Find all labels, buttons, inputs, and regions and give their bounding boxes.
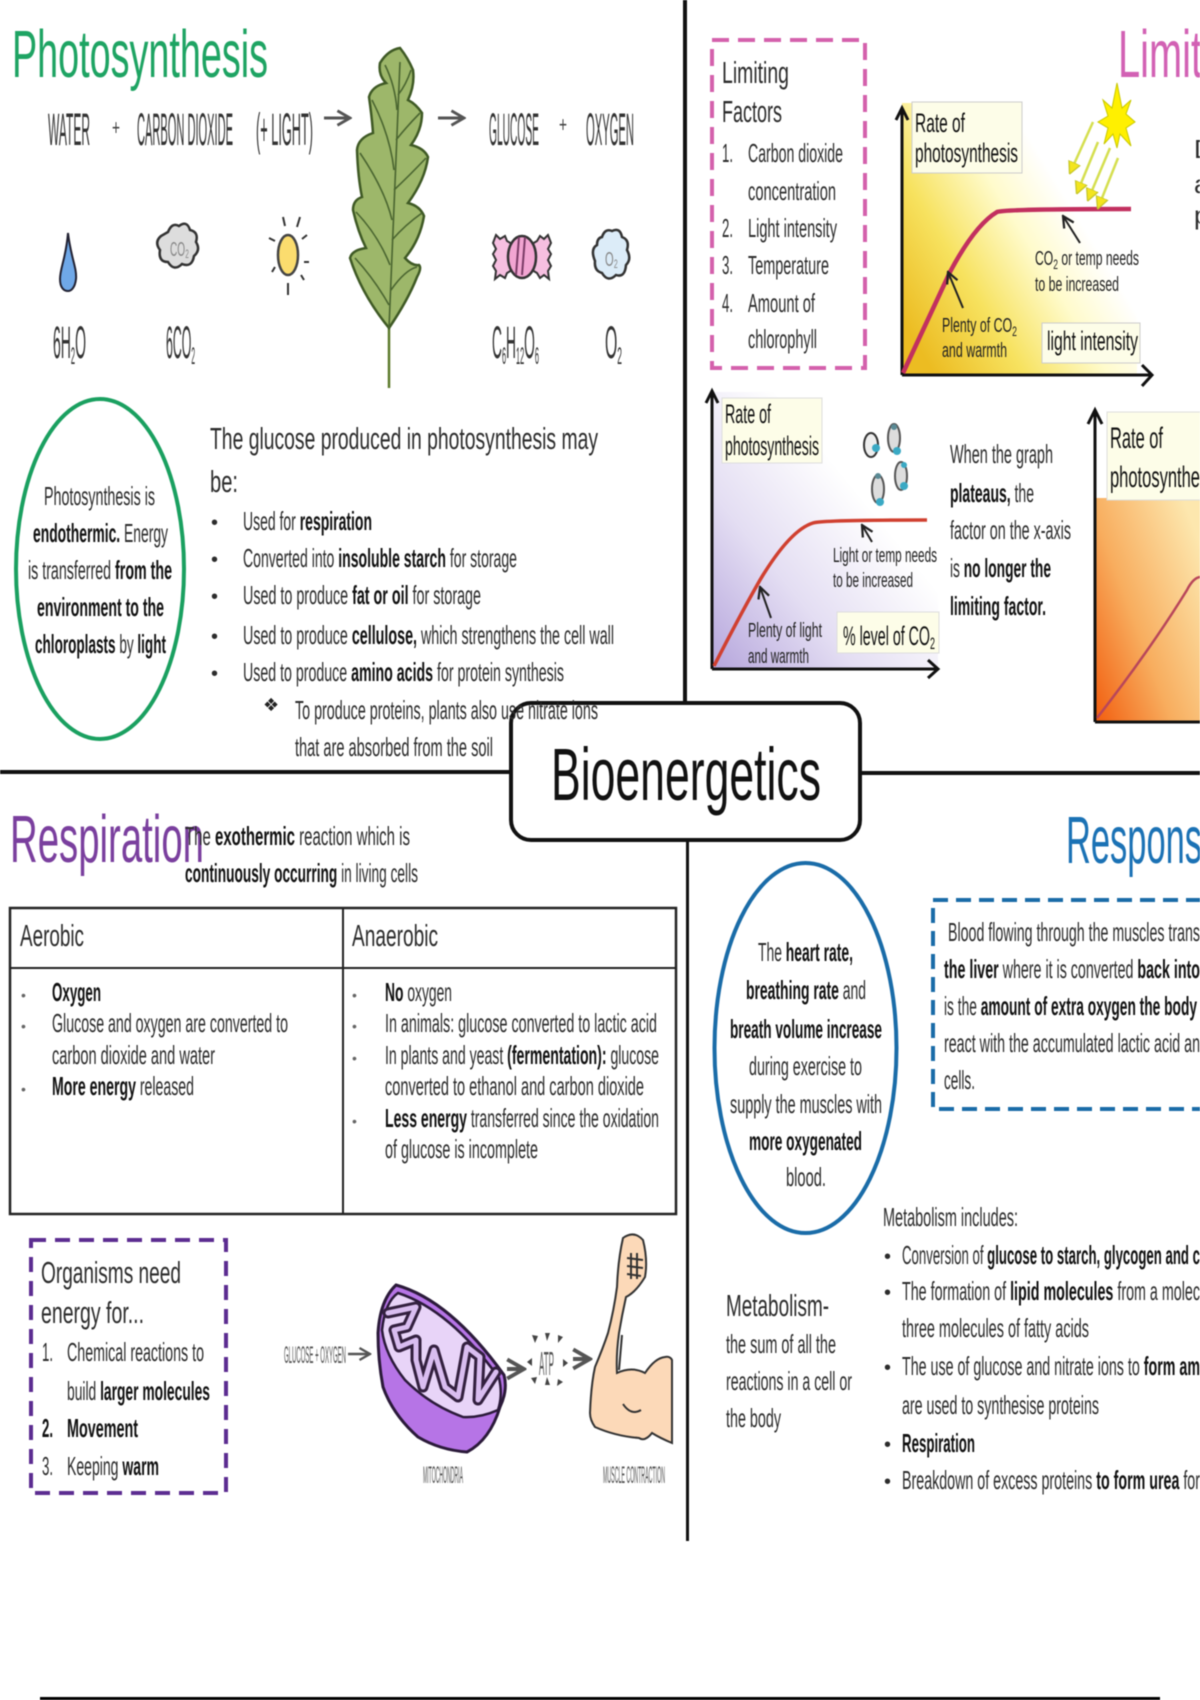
text block: plateau explanation <box>950 439 1071 621</box>
chart: carbon dioxide level: Rate of <box>725 399 771 429</box>
text block: plateau explanation: is no longer the <box>950 553 1051 583</box>
arrow: to ATP <box>507 1367 524 1371</box>
text: MUSCLE CONTRACTION <box>603 1462 665 1489</box>
dashed box: limiting factors list: Factors <box>722 94 782 129</box>
callout: exercise circle: blood. <box>786 1162 826 1192</box>
dashed box: limiting factors list: Carbon dioxide <box>748 138 843 168</box>
callout: exercise circle <box>714 863 896 1233</box>
chart: carbon dioxide level: to be increased <box>833 570 913 592</box>
dashed box: energy uses: Keeping warm <box>67 1451 159 1481</box>
chart: light intensity: to be increased <box>1035 274 1119 296</box>
text block: uses of glucose: Used to produce amino acids for protein synthesis <box>243 657 564 687</box>
text block: uses of glucose: • <box>211 512 218 534</box>
text block: plateau explanation: When the graph <box>950 439 1053 469</box>
table: aerobic and anaerobic: • <box>21 987 26 1003</box>
text block: uses of glucose: Used to produce fat or oil for storage <box>243 580 481 610</box>
callout: exercise circle: during exercise to <box>749 1051 862 1081</box>
callout: exercise circle: The heart rate, <box>758 937 853 967</box>
dashed box: limiting factors list: Light intensity <box>748 213 837 243</box>
table: aerobic and anaerobic: • <box>352 1113 357 1129</box>
formula labels: 2 <box>71 343 75 370</box>
formula labels: 6H <box>53 317 111 368</box>
dashed box: limiting factors list: chlorophyll <box>748 324 817 354</box>
text block: uses of glucose: be: <box>210 464 238 499</box>
dashed box: energy uses: Movement <box>67 1413 138 1443</box>
text block: metabolism definition: the sum of all the <box>726 1329 836 1359</box>
heading: respiration: Respiration <box>10 802 204 877</box>
text block: uses of glucose: • <box>211 549 218 571</box>
word equation: WATER <box>48 104 90 155</box>
table: aerobic and anaerobic: Aerobic <box>20 918 84 953</box>
text block: metabolism list: • <box>884 1246 891 1268</box>
text block: uses of glucose: • <box>211 586 218 608</box>
dashed box: limiting factors list: Temperature <box>748 250 829 280</box>
text block: metabolism list: • <box>884 1434 891 1456</box>
dashed box: limiting factors list: concentration <box>748 176 836 206</box>
formula labels: H <box>506 317 516 368</box>
arrow: into leaf <box>324 116 350 120</box>
dashed box: limiting factors list: 1. <box>722 138 733 168</box>
text block: respiration definition <box>185 821 418 888</box>
chart: light intensity: or temp needs <box>1058 248 1139 270</box>
text block: uses of glucose <box>210 421 614 762</box>
table: aerobic and anaerobic: • <box>352 1050 357 1066</box>
panel: respiration: GLUCOSE + OXYGEN <box>284 1342 346 1369</box>
text block: metabolism list: Metabolism includes: <box>883 1202 1018 1232</box>
text block: metabolism list: • <box>884 1357 891 1379</box>
chart: light intensity: Rate of <box>915 108 965 138</box>
dashed box: limiting factors list: 3. <box>722 250 733 280</box>
dashed box: limiting factors list: Amount of <box>748 288 815 318</box>
icon: carbon dioxide cloud: CO₂ <box>170 239 189 261</box>
panel: photosynthesis <box>12 17 634 762</box>
word equation: (+ LIGHT) <box>256 104 313 155</box>
word equation <box>48 104 634 155</box>
chart: light intensity <box>896 83 1152 386</box>
text block: uses of glucose: that are absorbed from the soil <box>295 732 493 762</box>
icon: mitochondrion <box>378 1285 505 1452</box>
text block: metabolism list <box>883 1202 1200 1495</box>
icon: ATP burst <box>527 1333 568 1386</box>
table: aerobic and anaerobic: • <box>21 1018 26 1034</box>
chart: carbon dioxide level: 2 <box>930 634 935 653</box>
text block: uses of glucose: Converted into insoluble starch for storage <box>243 543 517 573</box>
text block: plateau explanation: limiting factor. <box>950 591 1046 621</box>
callout: endothermic circle: environment to the <box>37 592 164 622</box>
dashed box: energy uses: Chemical reactions to <box>67 1337 204 1367</box>
table: aerobic and anaerobic: In plants and yeast (fermentation): glucose <box>385 1040 659 1070</box>
heading: photosynthesis: Photosynthesis <box>12 17 268 92</box>
table: aerobic and anaerobic: carbon dioxide and water <box>52 1040 215 1070</box>
chart: carbon dioxide level <box>706 391 939 678</box>
panel: limiting factors <box>706 17 1200 722</box>
panel: response to exercise <box>714 803 1200 1495</box>
panel: photosynthesis: O <box>605 317 640 368</box>
formula labels: 12 <box>516 343 524 370</box>
callout: exercise circle: more oxygenated <box>749 1126 862 1156</box>
formula labels: 6CO <box>166 317 259 368</box>
divider: right horizontal <box>860 771 1200 775</box>
icon: water drop <box>60 233 76 291</box>
dashed box: energy uses <box>31 1240 226 1493</box>
dashed box: energy uses: energy for... <box>41 1295 144 1330</box>
table: aerobic and anaerobic: • <box>352 987 357 1003</box>
chart: temperature, cropped <box>1088 410 1200 722</box>
word equation: + <box>112 115 120 140</box>
formula labels: 2 <box>191 343 195 370</box>
dashed box: limiting factors list: Limiting <box>722 55 789 90</box>
dashed box: energy uses: 3. <box>42 1451 53 1481</box>
callout: endothermic circle: is transferred from the <box>28 555 172 585</box>
text block: plateau explanation: factor on the x-axis <box>950 515 1071 545</box>
dashed box: energy uses: build larger molecules <box>67 1376 210 1406</box>
table: aerobic and anaerobic: Less energy transferred since the oxidation <box>385 1103 659 1133</box>
dashed box: oxygen debt: cells. <box>944 1065 975 1095</box>
dashed box: oxygen debt <box>933 900 1200 1109</box>
divider: bottom edge <box>40 1697 1160 1700</box>
table: aerobic and anaerobic: More energy released <box>52 1071 194 1101</box>
dashed box: energy uses: 2. <box>42 1413 53 1443</box>
chart: carbon dioxide level: Plenty of light <box>748 620 822 642</box>
text block: respiration definition: continuously occurring in living cells <box>185 858 418 888</box>
formula labels <box>53 317 622 370</box>
text block: plateau explanation: plateaus, the <box>950 478 1034 508</box>
table: aerobic and anaerobic: Oxygen <box>52 977 101 1007</box>
icon: oxygen cloud: O₂ <box>605 249 618 271</box>
chart: carbon dioxide level: photosynthesis <box>725 431 819 461</box>
text block: metabolism list: • <box>884 1471 891 1493</box>
text: OXYGEN <box>586 104 634 155</box>
chart: light intensity: CO <box>1035 248 1065 270</box>
icon: carbon dioxide molecules <box>864 424 908 506</box>
dashed box: limiting factors list: 4. <box>722 288 733 318</box>
arrow: out of leaf <box>438 116 464 120</box>
table: aerobic and anaerobic: of glucose is incomplete <box>385 1134 538 1164</box>
chart: light intensity: light intensity <box>1047 326 1138 356</box>
chart: carbon dioxide level: % level of CO <box>843 621 1008 651</box>
icon: flexed arm <box>590 1234 672 1443</box>
text block: uses of glucose: Used to produce cellulose, which strengthens the cell wall <box>243 620 614 650</box>
callout: endothermic circle: endothermic. Energy <box>33 518 168 548</box>
panel: respiration: MITOCHONDRIA <box>423 1462 463 1489</box>
text block: uses of glucose: • <box>211 626 218 648</box>
table: aerobic and anaerobic: converted to ethanol and carbon dioxide <box>385 1071 644 1101</box>
table: aerobic and anaerobic <box>10 908 676 1214</box>
divider: bottom vertical <box>686 840 689 1541</box>
chart: light intensity: Plenty of CO <box>942 315 1055 337</box>
text block: uses of glucose: ❖ <box>263 695 279 716</box>
chart: light intensity: 2 <box>1012 323 1017 339</box>
text fragment: cropped paragraph <box>1194 134 1200 230</box>
callout: endothermic circle <box>16 399 184 739</box>
text block: metabolism definition: the body <box>726 1403 781 1433</box>
panel: respiration: ATP <box>539 1345 554 1382</box>
table: aerobic and anaerobic: • <box>21 1081 26 1097</box>
formula labels: O <box>75 317 86 368</box>
panel: photosynthesis: 2 <box>617 343 622 370</box>
callout: endothermic circle: chloroplasts by light <box>35 629 166 659</box>
text block: metabolism definition: Metabolism- <box>726 1288 829 1323</box>
text block: metabolism definition <box>726 1288 852 1433</box>
divider: left horizontal <box>0 770 511 774</box>
callout: exercise circle: supply the muscles with <box>730 1089 882 1119</box>
word equation: GLUCOSE <box>489 104 539 155</box>
chart: carbon dioxide level: and warmth <box>748 646 809 668</box>
word equation: + <box>559 112 567 137</box>
chart: carbon dioxide level: Light or temp needs <box>833 545 937 567</box>
divider: top vertical <box>683 0 687 702</box>
icon: sun <box>269 217 309 295</box>
text block: metabolism definition: reactions in a cell or <box>726 1366 852 1396</box>
text block: metabolism list: Respiration <box>902 1428 975 1458</box>
dashed box: energy uses: Organisms need <box>41 1255 181 1290</box>
title text: Bioenergetics <box>551 733 821 816</box>
dashed box: energy uses: 1. <box>42 1337 53 1367</box>
formula labels: 6 <box>502 343 506 370</box>
chart: light intensity: and warmth <box>942 340 1007 362</box>
panel: respiration <box>10 802 676 1493</box>
icon: oxygen cloud <box>593 230 629 279</box>
word equation: CARBON DIOXIDE <box>137 104 233 155</box>
text block: uses of glucose: • <box>211 663 218 685</box>
table: aerobic and anaerobic: Anaerobic <box>352 918 438 953</box>
dashed box: limiting factors list <box>712 40 865 368</box>
dashed box: limiting factors list: 2. <box>722 213 733 243</box>
table: aerobic and anaerobic: In animals: glucose converted to lactic acid <box>385 1008 657 1038</box>
text block: metabolism list: • <box>884 1282 891 1304</box>
title box <box>511 703 860 840</box>
formula labels: 6 <box>535 343 539 370</box>
text block: uses of glucose: To produce proteins, plants also use nitrate ions <box>295 695 598 725</box>
text block: uses of glucose: Used for respiration <box>243 506 372 536</box>
arrow: into mitochondrion <box>348 1353 370 1355</box>
text block: respiration definition: The exothermic reaction which is <box>185 821 410 851</box>
arrow: to muscle <box>573 1357 590 1361</box>
formula labels: O <box>524 317 535 368</box>
icon: glucose sweet <box>493 235 551 279</box>
text block: uses of glucose: The glucose produced in photosynthesis may <box>210 421 598 456</box>
table: aerobic and anaerobic: • <box>352 1018 357 1034</box>
table: aerobic and anaerobic: No oxygen <box>385 977 452 1007</box>
icon: leaf <box>350 48 428 388</box>
callout: exercise circle: breathing rate and <box>746 975 866 1005</box>
chart: light intensity: photosynthesis <box>915 138 1018 168</box>
formula labels: C <box>492 317 524 368</box>
table: aerobic and anaerobic: Glucose and oxygen are converted to <box>52 1008 288 1038</box>
callout: endothermic circle: Photosynthesis is <box>44 481 155 511</box>
callout: exercise circle: breath volume increase <box>730 1014 882 1044</box>
chart: light intensity: 2 <box>1053 256 1058 272</box>
icon: carbon dioxide cloud <box>157 224 198 268</box>
